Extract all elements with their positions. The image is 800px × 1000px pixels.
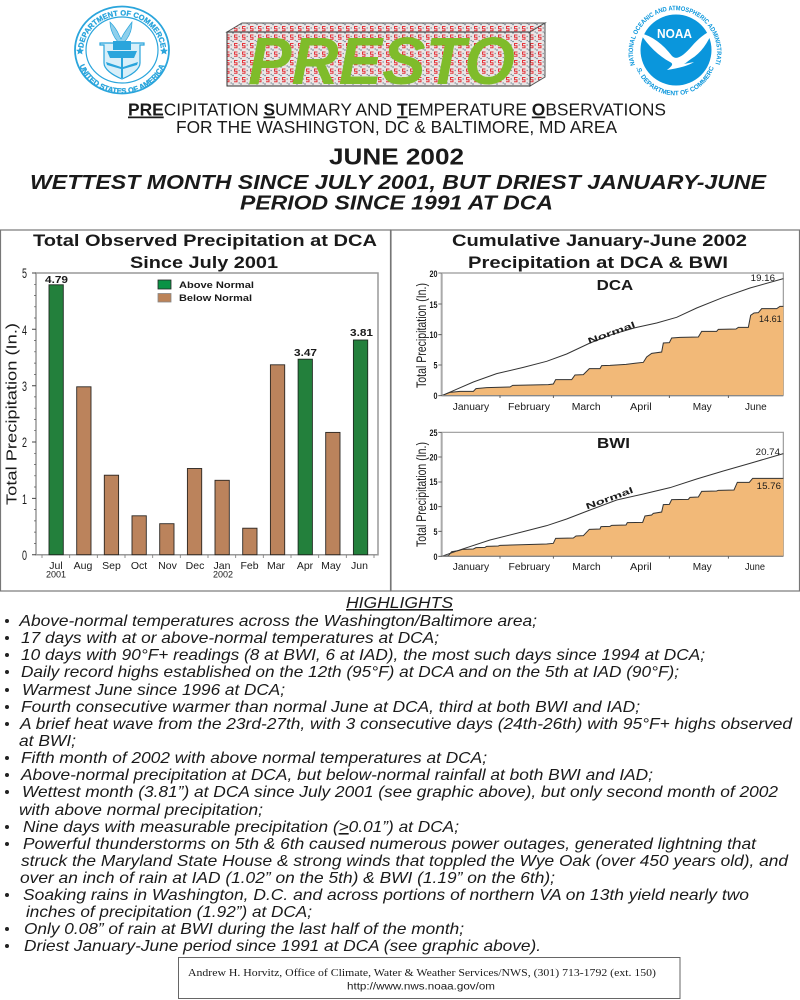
heading: PRESTO expansion: PRECIPITATION SUMMARY AND TEMPERATURE OBSERVATIONS [128, 100, 666, 120]
month labels: May [321, 560, 342, 572]
text block: highlights list: Only 0.08” of rain at BWI during the last half of the month; [24, 921, 464, 938]
y axis labels: 1 [22, 491, 27, 507]
month labels [453, 561, 765, 573]
month labels: May [693, 401, 712, 413]
month labels: February [508, 401, 551, 413]
chart title: monthly precipitation [33, 231, 377, 272]
month labels: Jun [351, 560, 368, 572]
text block: highlights list: at BWI; [19, 733, 76, 750]
normal line label: Normal [584, 485, 635, 511]
heading: subtitle: WETTEST MONTH SINCE JULY 2001, BUT DRIEST JANUARY-JUNE [30, 172, 767, 194]
y axis [430, 269, 438, 401]
y axis: 5 [434, 527, 438, 537]
month labels: February [508, 561, 551, 573]
logo: NOAA emblem [628, 6, 722, 96]
DCA label: DCA [597, 277, 633, 294]
text block: highlights list: 17 days with at or above-normal temperatures at DCA; [21, 630, 439, 647]
y axis: 15 [430, 300, 438, 310]
heading: month: JUNE 2002 [329, 144, 464, 170]
text block: highlights list: inches of precipitation (1.92”) at DCA; [26, 904, 312, 921]
text block: highlights list: Fourth consecutive warmer than normal June at DCA, third at both BWI and IAD; [21, 699, 640, 716]
chart title: monthly precipitation: Total Observed Precipitation at DCA [33, 231, 377, 250]
month labels: Jul [49, 560, 63, 572]
month labels: Mar [267, 560, 286, 572]
legend: Above Normal [179, 280, 254, 291]
y axis labels [22, 265, 27, 563]
month labels [453, 401, 767, 413]
y axis [430, 428, 438, 562]
value labels: 3.81 [350, 328, 374, 339]
area chart: DCA [413, 269, 783, 413]
month labels: April [630, 561, 652, 573]
bars: below normal [77, 365, 340, 555]
y axis: 10 [430, 330, 438, 340]
month labels: Aug [74, 560, 92, 572]
heading: subtitle [30, 172, 767, 214]
text block: highlights list: over an inch of rain at IAD (1.02” on the 5th) & BWI (1.19” on the 6th); [20, 870, 555, 887]
bar chart: monthly totals [4, 265, 378, 580]
text block: highlights list: Daily record highs established on the 12th (95°F) at DCA and on the 5th at IAD (90°F); [21, 664, 679, 681]
bars: above normal [49, 285, 368, 555]
month labels: March [572, 561, 601, 573]
month labels: Dec [186, 560, 204, 572]
y axis: 5 [434, 360, 438, 370]
panel: cumulative precipitation [391, 230, 800, 591]
y axis: 20 [430, 269, 438, 279]
month labels: May [693, 561, 712, 573]
text block: highlights list: Fifth month of 2002 with above normal temperatures at DCA; [21, 750, 487, 767]
heading: PRESTO expansion: FOR THE WASHINGTON, DC & BALTIMORE, MD AREA [176, 117, 617, 137]
legend [158, 280, 254, 304]
chart title: cumulative precipitation [452, 231, 747, 272]
logo: Department of Commerce seal [74, 6, 170, 94]
month labels: Sep [102, 560, 121, 572]
month labels: Feb [240, 560, 259, 572]
y axis labels: 3 [22, 378, 27, 394]
y axis title: Total Precipitation (In.) [4, 323, 20, 505]
value labels [45, 275, 374, 359]
chart title: cumulative precipitation: Cumulative January-June 2002 [452, 231, 747, 250]
month labels: January [453, 561, 490, 573]
heading: subtitle: PERIOD SINCE 1991 AT DCA [240, 192, 553, 214]
text block: highlights list: struck the Maryland State House & strong winds that toppled the Wye Oak (over 450 years old), and [21, 853, 789, 870]
heading: highlights: HIGHLIGHTS [346, 595, 453, 612]
logo: Department of Commerce seal: UNITED STATES OF AMERICA [80, 64, 165, 93]
y axis: 10 [430, 502, 438, 512]
BWI label: BWI [597, 435, 630, 452]
text block: highlights list: Warmest June since 1996 at DCA; [22, 682, 285, 699]
chart title: cumulative precipitation: Precipitation at DCA & BWI [468, 253, 728, 272]
text block: highlights list: A brief heat wave from the 23rd-27th, with 3 consecutive days (24th-26th) with 95°F+ highs observed [19, 716, 793, 733]
logo: NOAA emblem: NOAA [657, 26, 693, 41]
chart title: monthly precipitation: Since July 2001 [130, 253, 278, 272]
month labels: March [572, 401, 601, 413]
y axis labels: 0 [22, 547, 27, 563]
value labels: 4.79 [45, 275, 69, 286]
y axis labels: 4 [22, 322, 27, 338]
month labels: Nov [158, 560, 178, 572]
text block: highlights list: Above-normal temperatures across the Washington/Baltimore area; [18, 613, 537, 630]
text block: highlights list: Above-normal precipitation at DCA, but below-normal rainfall at both BWI and IAD; [20, 767, 653, 784]
value labels [751, 273, 782, 325]
y axis title: Total Precipitation (In.) [413, 283, 429, 388]
value labels: 19.16 [751, 273, 775, 284]
logo: Department of Commerce seal: DEPARTMENT OF COMMERCE [78, 10, 166, 48]
legend: Below Normal [179, 293, 252, 304]
footer: contact box [178, 958, 680, 998]
month labels: Oct [131, 560, 147, 572]
footer: contact box: http://www.nws.noaa.gov/om [347, 982, 495, 992]
y axis labels: 5 [22, 265, 27, 281]
y axis: 0 [434, 552, 438, 562]
y axis: 15 [430, 477, 438, 487]
y axis title: Total Precipitation (In.) [413, 442, 429, 547]
panel: monthly precipitation [0, 230, 390, 591]
y axis: 20 [430, 452, 438, 462]
normal line label: Normal [586, 319, 637, 346]
y axis: 0 [434, 391, 438, 401]
month labels: 2002 [213, 570, 233, 580]
text block: highlights list: Wettest month (3.81”) at DCA since July 2001 (see graphic above), but only second month of 2002 [22, 784, 778, 801]
text block: highlights list: Soaking rains in Washington, D.C. and across portions of northern VA on 13th yield nearly two [23, 887, 749, 904]
text block: highlights list: Nine days with measurable precipitation ( >0.01”) at DCA; [23, 819, 459, 836]
text block: highlights list: with above normal precipitation; [19, 802, 263, 819]
month labels: June [745, 561, 765, 573]
value labels: 3.47 [294, 348, 318, 359]
month labels: Jan [214, 560, 231, 572]
area chart: BWI [413, 428, 783, 573]
y axis labels: 2 [22, 434, 27, 450]
value labels: 20.74 [756, 447, 780, 458]
text block: highlights list: 10 days with 90°F+ readings (8 at BWI, 6 at IAD), the most such days since 1994 at DCA; [21, 647, 705, 664]
month labels: January [453, 401, 490, 413]
value labels: 15.76 [757, 481, 781, 492]
logo: PRESTO block: PRESTO [248, 24, 515, 99]
heading: PRESTO expansion [128, 100, 666, 137]
month labels [46, 560, 368, 580]
month labels: 2001 [46, 570, 66, 580]
month labels: April [630, 401, 652, 413]
y axis: 25 [430, 428, 438, 438]
text block: highlights list: Driest January-June period since 1991 at DCA (see graphic above). [24, 938, 541, 955]
footer: contact box: Andrew H. Horvitz, Office of Climate, Water & Weather Services/NWS, (301) 713-1792 (ext. 150) [188, 968, 657, 979]
value labels [756, 447, 781, 492]
month labels: June [745, 401, 767, 413]
value labels: 14.61 [759, 314, 782, 325]
text block: highlights list: Powerful thunderstorms on 5th & 6th caused numerous power outages, generated lightning that [23, 836, 757, 853]
text block: highlights list [5, 613, 793, 955]
month labels: Apr [297, 560, 314, 572]
